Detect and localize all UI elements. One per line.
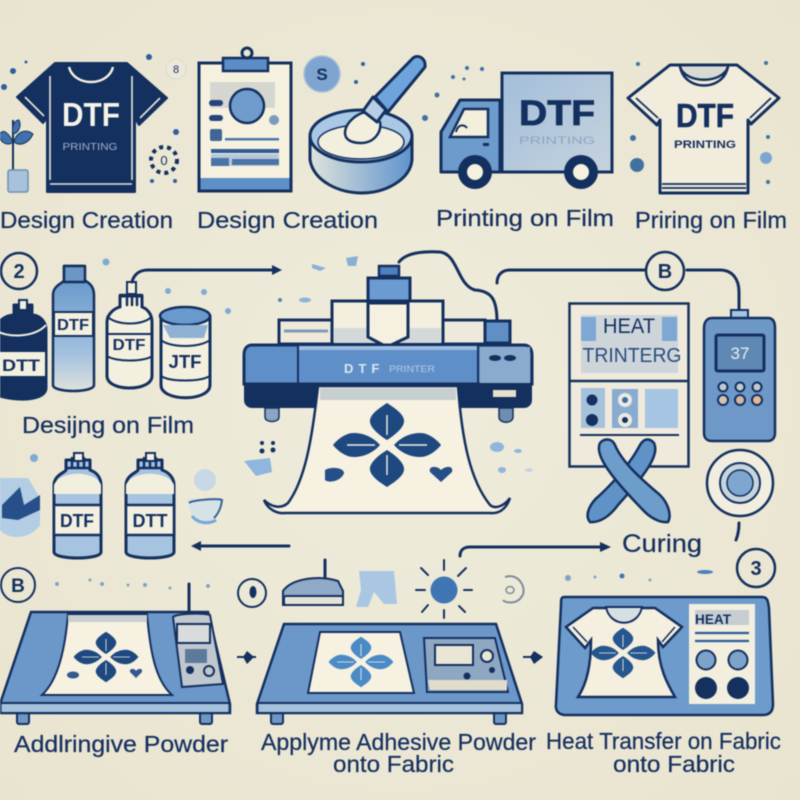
label: Curing: Curing — [622, 530, 702, 558]
icon: crossed pliers — [588, 439, 670, 522]
icon: bowl with brush — [310, 56, 425, 193]
step badge B lower — [1, 568, 35, 602]
icon: central DTF printer — [244, 252, 532, 513]
arrow: printer line to step badge — [497, 270, 645, 283]
step badge B lower: B — [11, 576, 25, 597]
printer cable — [399, 252, 497, 322]
icon: adhesive applying table — [257, 624, 522, 724]
printer blue body — [244, 345, 532, 384]
panel: heat printing sheet — [570, 304, 688, 466]
icon: dark DTF t-shirt: PRINTING — [62, 142, 118, 153]
label: Designing on Film: Desijng on Film — [22, 412, 194, 438]
icon: dark ink bottle — [0, 300, 46, 399]
decorative blue splashes: left — [30, 258, 231, 462]
icon: potted plant — [0, 120, 33, 192]
panel: heat transfer press — [556, 597, 773, 715]
icon: central DTF printer: DTF — [344, 361, 384, 376]
label: Printing on Film 1: Printing on Film — [436, 205, 614, 231]
label: Adding Adhesive Powder: Addlringive Powder — [14, 731, 228, 757]
decorative open circle — [503, 576, 524, 603]
step badge 0 — [238, 579, 266, 607]
printer dark base — [244, 383, 532, 408]
arrow: inks to printer — [132, 265, 282, 282]
label: Design Creation 1: Design Creation — [0, 207, 173, 233]
icon: blurry blue squiggle — [356, 571, 397, 607]
icon: dotted ring with 0 — [151, 147, 177, 173]
icon: blurry blue tray left — [0, 478, 40, 537]
decorative specks: right tee — [630, 61, 772, 184]
decorative specks row — [55, 578, 210, 590]
step badge 5: S — [316, 65, 328, 84]
icon: light DTF t-shirt: PRINTING — [674, 139, 736, 151]
film flower print — [333, 403, 441, 487]
icon: dark DTF t-shirt — [17, 63, 167, 192]
panel: heat transfer press: HEAT — [695, 611, 731, 627]
decorative dots: upper left — [1, 54, 365, 183]
label: Heat Transfer on Fabric: Heat Transfer on Fabric — [546, 728, 781, 754]
heat transfer t-shirt — [566, 608, 682, 697]
icon: DTF bottle B: DTT — [132, 511, 168, 531]
icon: wide jar — [160, 307, 210, 398]
arrow: back to bottles — [191, 541, 289, 551]
label: Applying Adhesive Powder: Applyme Adhesive Powder — [261, 729, 536, 755]
step badge B: B — [658, 261, 672, 283]
step badge 2 — [1, 253, 37, 289]
icon: DTF bottle A — [54, 453, 101, 558]
icon: dark DTF t-shirt: DTF — [62, 96, 120, 133]
icon: small step 8 badge: 8 — [173, 64, 179, 76]
icon: central DTF printer: PRINTER — [389, 364, 436, 374]
step badge 3 — [737, 549, 775, 587]
label: Design Creation 2: Design Creation — [197, 207, 378, 233]
cable: badge to controller — [687, 270, 739, 309]
icon: DTF bottle A: DTF — [60, 511, 94, 531]
printer side box — [485, 321, 510, 343]
decorative specks row right — [565, 570, 713, 582]
panel: heat printing sheet: TRINTERG — [582, 345, 682, 367]
printer top cap — [379, 266, 399, 276]
icon: small press — [283, 560, 343, 605]
icon: sun — [416, 560, 472, 618]
panel: heat printing sheet: HEAT — [603, 315, 655, 338]
step badge 3: 3 — [750, 558, 762, 580]
step badge 2: 2 — [13, 261, 25, 283]
arrow: small to transfer panel — [523, 651, 543, 664]
icon: light DTF t-shirt: DTF — [676, 97, 734, 134]
icon: small step 8 badge — [166, 59, 186, 79]
icon: DTF delivery truck: PRINTING — [519, 135, 595, 147]
icon: controller device — [704, 310, 775, 441]
icon: dotted ring with 0: 0 — [160, 153, 168, 168]
icon: controller device: 37 — [731, 344, 749, 363]
film small marks — [325, 468, 344, 482]
icon: wide jar: JTF — [168, 352, 202, 372]
decorative specks around printer — [244, 256, 533, 476]
icon: cream bottle: DTF — [112, 337, 146, 354]
arrow: curing — [460, 542, 611, 556]
step badge 5 — [304, 56, 340, 92]
step badge B — [646, 252, 684, 290]
printed film — [264, 386, 510, 513]
label: Printing on Film 2: Priring on Film — [635, 207, 787, 233]
icon: blurry cup right of bottles — [188, 469, 222, 525]
printer mid housing — [279, 320, 485, 344]
icon: cream bottle — [107, 282, 152, 388]
icon: tall blue bottle: DTF — [57, 317, 89, 334]
label: onto Fabric left: onto Fabric — [333, 751, 454, 777]
icon: light DTF t-shirt — [628, 65, 779, 193]
heat control card — [689, 604, 755, 704]
icon: tall blue bottle — [53, 266, 94, 391]
printer feet — [265, 408, 279, 422]
icon: DTF bottle B — [126, 453, 174, 558]
icon: clipboard design sheet — [199, 48, 291, 191]
icon: dial knob — [707, 450, 773, 540]
label: onto Fabric right: onto Fabric — [613, 751, 735, 777]
icon: DTF delivery truck: DTF — [519, 94, 595, 133]
decorative specks: truck area — [422, 66, 484, 121]
icon: adhesive powder table — [0, 584, 230, 724]
icon: DTF delivery truck — [441, 73, 612, 189]
icon: dark ink bottle: DTT — [2, 356, 41, 375]
arrow: small between tables — [237, 651, 256, 664]
